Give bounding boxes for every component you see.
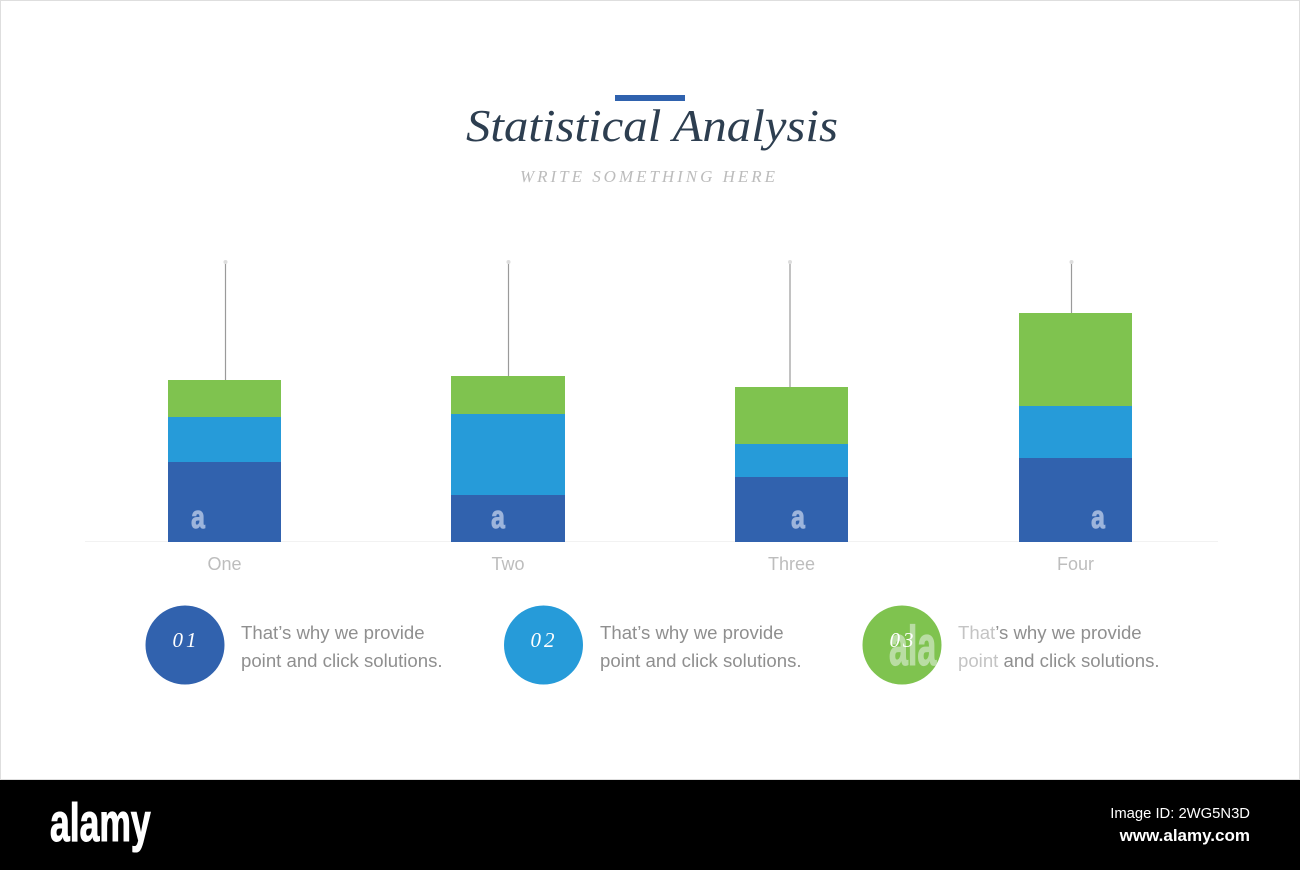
legend item 01: point and click solutions. [241, 650, 443, 671]
axis label: Two: Two [491, 554, 525, 574]
footer band [0, 780, 1300, 870]
legend item 02: point and click solutions. [600, 650, 802, 671]
legend item 01: 01 [172, 628, 200, 652]
legend item 02 [504, 606, 802, 684]
title accent bar [615, 95, 685, 101]
bar: Three [735, 260, 848, 542]
footer url: www.alamy.com [1119, 826, 1250, 845]
subtitle: WRITE SOMETHING HERE [520, 167, 776, 186]
bar: Two: a [491, 500, 506, 536]
axis label: Three: Three [768, 554, 815, 574]
bar: Four [1019, 260, 1132, 542]
footer image id: Image ID: 2WG5N3D [1110, 806, 1250, 822]
bar: Three: a [791, 500, 806, 536]
legend item 02: 02 [530, 628, 558, 652]
legend item 01: That’s why we provide [241, 622, 425, 643]
bar: One: a [191, 500, 206, 536]
legend item 03: ala [889, 614, 937, 677]
legend item 03: 03 [890, 628, 916, 652]
legend item 03: point and click solutions. [958, 650, 1160, 671]
bar: Two [451, 260, 565, 542]
legend item 02: That’s why we provide [600, 622, 784, 643]
bar: Four: a [1091, 500, 1106, 536]
bar chart [168, 260, 1132, 542]
legend item 03: That’s why we provide [958, 622, 1142, 643]
title: Statistical Analysis [466, 100, 838, 151]
legend item 01 [146, 606, 443, 684]
footer logo: alamy [50, 793, 151, 853]
axis label: Four: Four [1057, 554, 1094, 574]
bar: One [168, 260, 281, 542]
legend item 03 [862, 606, 1160, 684]
baseline [85, 540, 1218, 542]
axis label: One: One [207, 554, 242, 574]
